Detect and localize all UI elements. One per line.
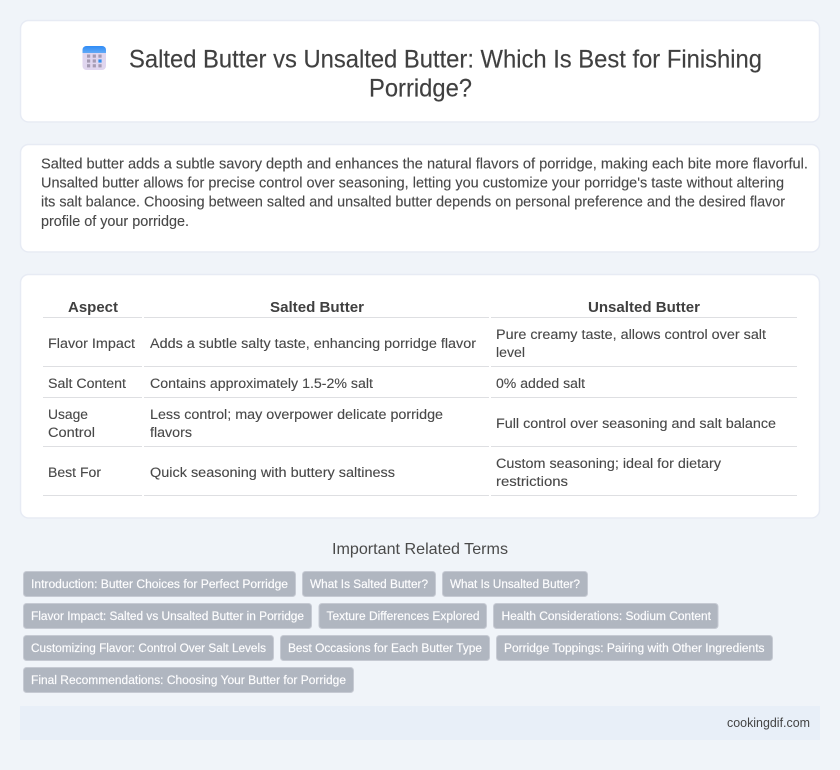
row: usage control: flavors — [150, 425, 192, 441]
tag: Porridge Toppings: Pairing with Other Ingredients — [504, 641, 764, 655]
tag — [24, 668, 354, 692]
row: best for: Best For — [48, 465, 101, 481]
title — [129, 46, 762, 102]
tag: Texture Differences Explored — [326, 609, 480, 623]
panel: title header — [20, 20, 820, 122]
table header row — [68, 299, 700, 316]
tag: Best Occasions for Each Butter Type — [288, 641, 482, 655]
row: salt content: 0% added salt — [496, 376, 585, 392]
tag — [24, 604, 312, 628]
panel: comparison table — [20, 274, 820, 518]
tag — [496, 636, 772, 660]
intro text: its salt balance. Choosing between salted and unsalted butter depends on personal preference and the desired flavor — [41, 195, 785, 211]
tag: What Is Salted Butter? — [310, 577, 428, 591]
tag — [494, 604, 718, 628]
table header row: Salted Butter — [270, 299, 364, 316]
icon: calendar — [82, 46, 106, 70]
intro text: profile of your porridge. — [41, 214, 189, 230]
table header row: Unsalted Butter — [588, 299, 700, 316]
tag: Final Recommendations: Choosing Your Butter for Porridge — [31, 673, 346, 687]
title: Porridge? — [369, 74, 472, 102]
heading: important related terms: Important Related Terms — [332, 541, 508, 558]
title: Salted Butter vs Unsalted Butter: Which Is Best for Finishing — [129, 46, 762, 74]
row: usage control: Full control over seasoning and salt balance — [496, 416, 776, 432]
row: usage control: Less control; may overpower delicate porridge — [150, 407, 443, 423]
row: usage control — [48, 407, 776, 441]
tag: Flavor Impact: Salted vs Unsalted Butter in Porridge — [31, 609, 304, 623]
panel: introduction — [20, 144, 820, 252]
tag: What Is Unsalted Butter? — [450, 577, 580, 591]
tag — [24, 572, 296, 596]
tag — [442, 572, 588, 596]
tag — [24, 636, 274, 660]
row: best for — [48, 456, 722, 490]
footer source: cookingdif.com — [727, 716, 810, 730]
related term tags — [24, 572, 772, 692]
row: flavor impact: Adds a subtle salty taste, enhancing porridge flavor — [150, 336, 476, 352]
intro text: Salted butter adds a subtle savory depth and enhances the natural flavors of porridge, making each bite more flavorful. — [41, 156, 808, 172]
row: usage control: Control — [48, 425, 95, 441]
row: salt content: Salt Content — [48, 376, 126, 392]
intro text: Unsalted butter allows for precise control over seasoning, letting you customize your porridge's taste without altering — [41, 176, 784, 192]
row: salt content — [48, 376, 585, 392]
tag — [302, 572, 436, 596]
row: best for: restrictions — [496, 474, 568, 490]
tag: Health Considerations: Sodium Content — [502, 609, 712, 623]
tag — [319, 604, 486, 628]
tag: Introduction: Butter Choices for Perfect Porridge — [31, 577, 288, 591]
row: flavor impact: Pure creamy taste, allows control over salt — [496, 327, 766, 343]
row: best for: Custom seasoning; ideal for dietary — [496, 456, 722, 472]
tag — [280, 636, 490, 660]
row: flavor impact: Flavor Impact — [48, 336, 135, 352]
footer bar — [20, 706, 820, 740]
table header row: Aspect — [68, 299, 118, 316]
row: flavor impact: level — [496, 345, 525, 361]
row: salt content: Contains approximately 1.5-2% salt — [150, 376, 373, 392]
intro text — [41, 156, 808, 230]
row: best for: Quick seasoning with buttery saltiness — [150, 465, 395, 481]
row: usage control: Usage — [48, 407, 88, 423]
tag: Customizing Flavor: Control Over Salt Levels — [31, 641, 266, 655]
row: flavor impact — [48, 327, 766, 361]
